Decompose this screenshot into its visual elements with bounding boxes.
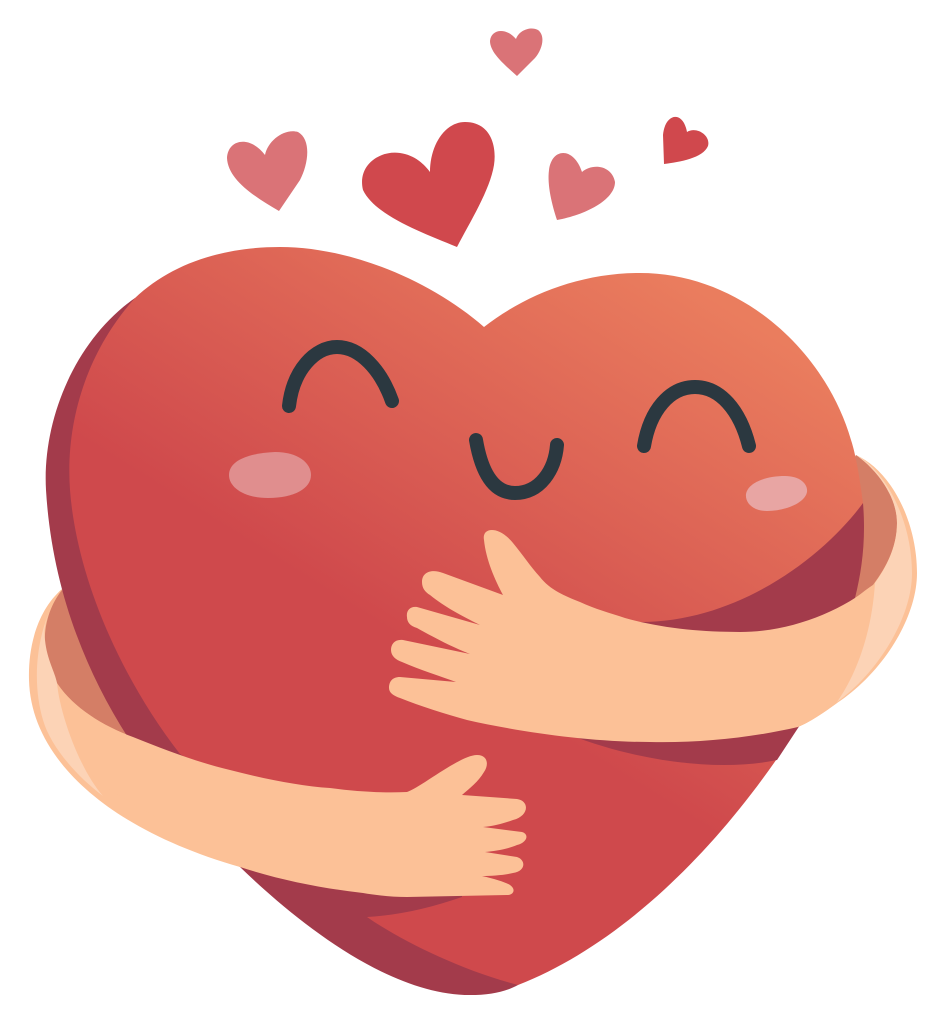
small heart: right [549,153,615,220]
right eye [644,387,749,446]
right cheek [746,476,807,511]
lower arm and hand [55,680,526,897]
shadow under upper arm [570,725,800,765]
left arm ring behind heart [29,589,240,867]
small heart: left [227,131,307,211]
right arm highlight [837,455,912,702]
large heart: centre [362,122,495,247]
heart body [69,247,863,985]
mouth [476,440,557,493]
small heart: far right [663,117,708,164]
upper arm and hand [389,530,880,742]
left cheek [229,452,311,498]
small heart: top [490,28,542,76]
heart shadow side [46,298,864,995]
right arm ring behind heart [780,455,917,727]
left eye [289,347,392,406]
left arm highlight [37,603,103,796]
